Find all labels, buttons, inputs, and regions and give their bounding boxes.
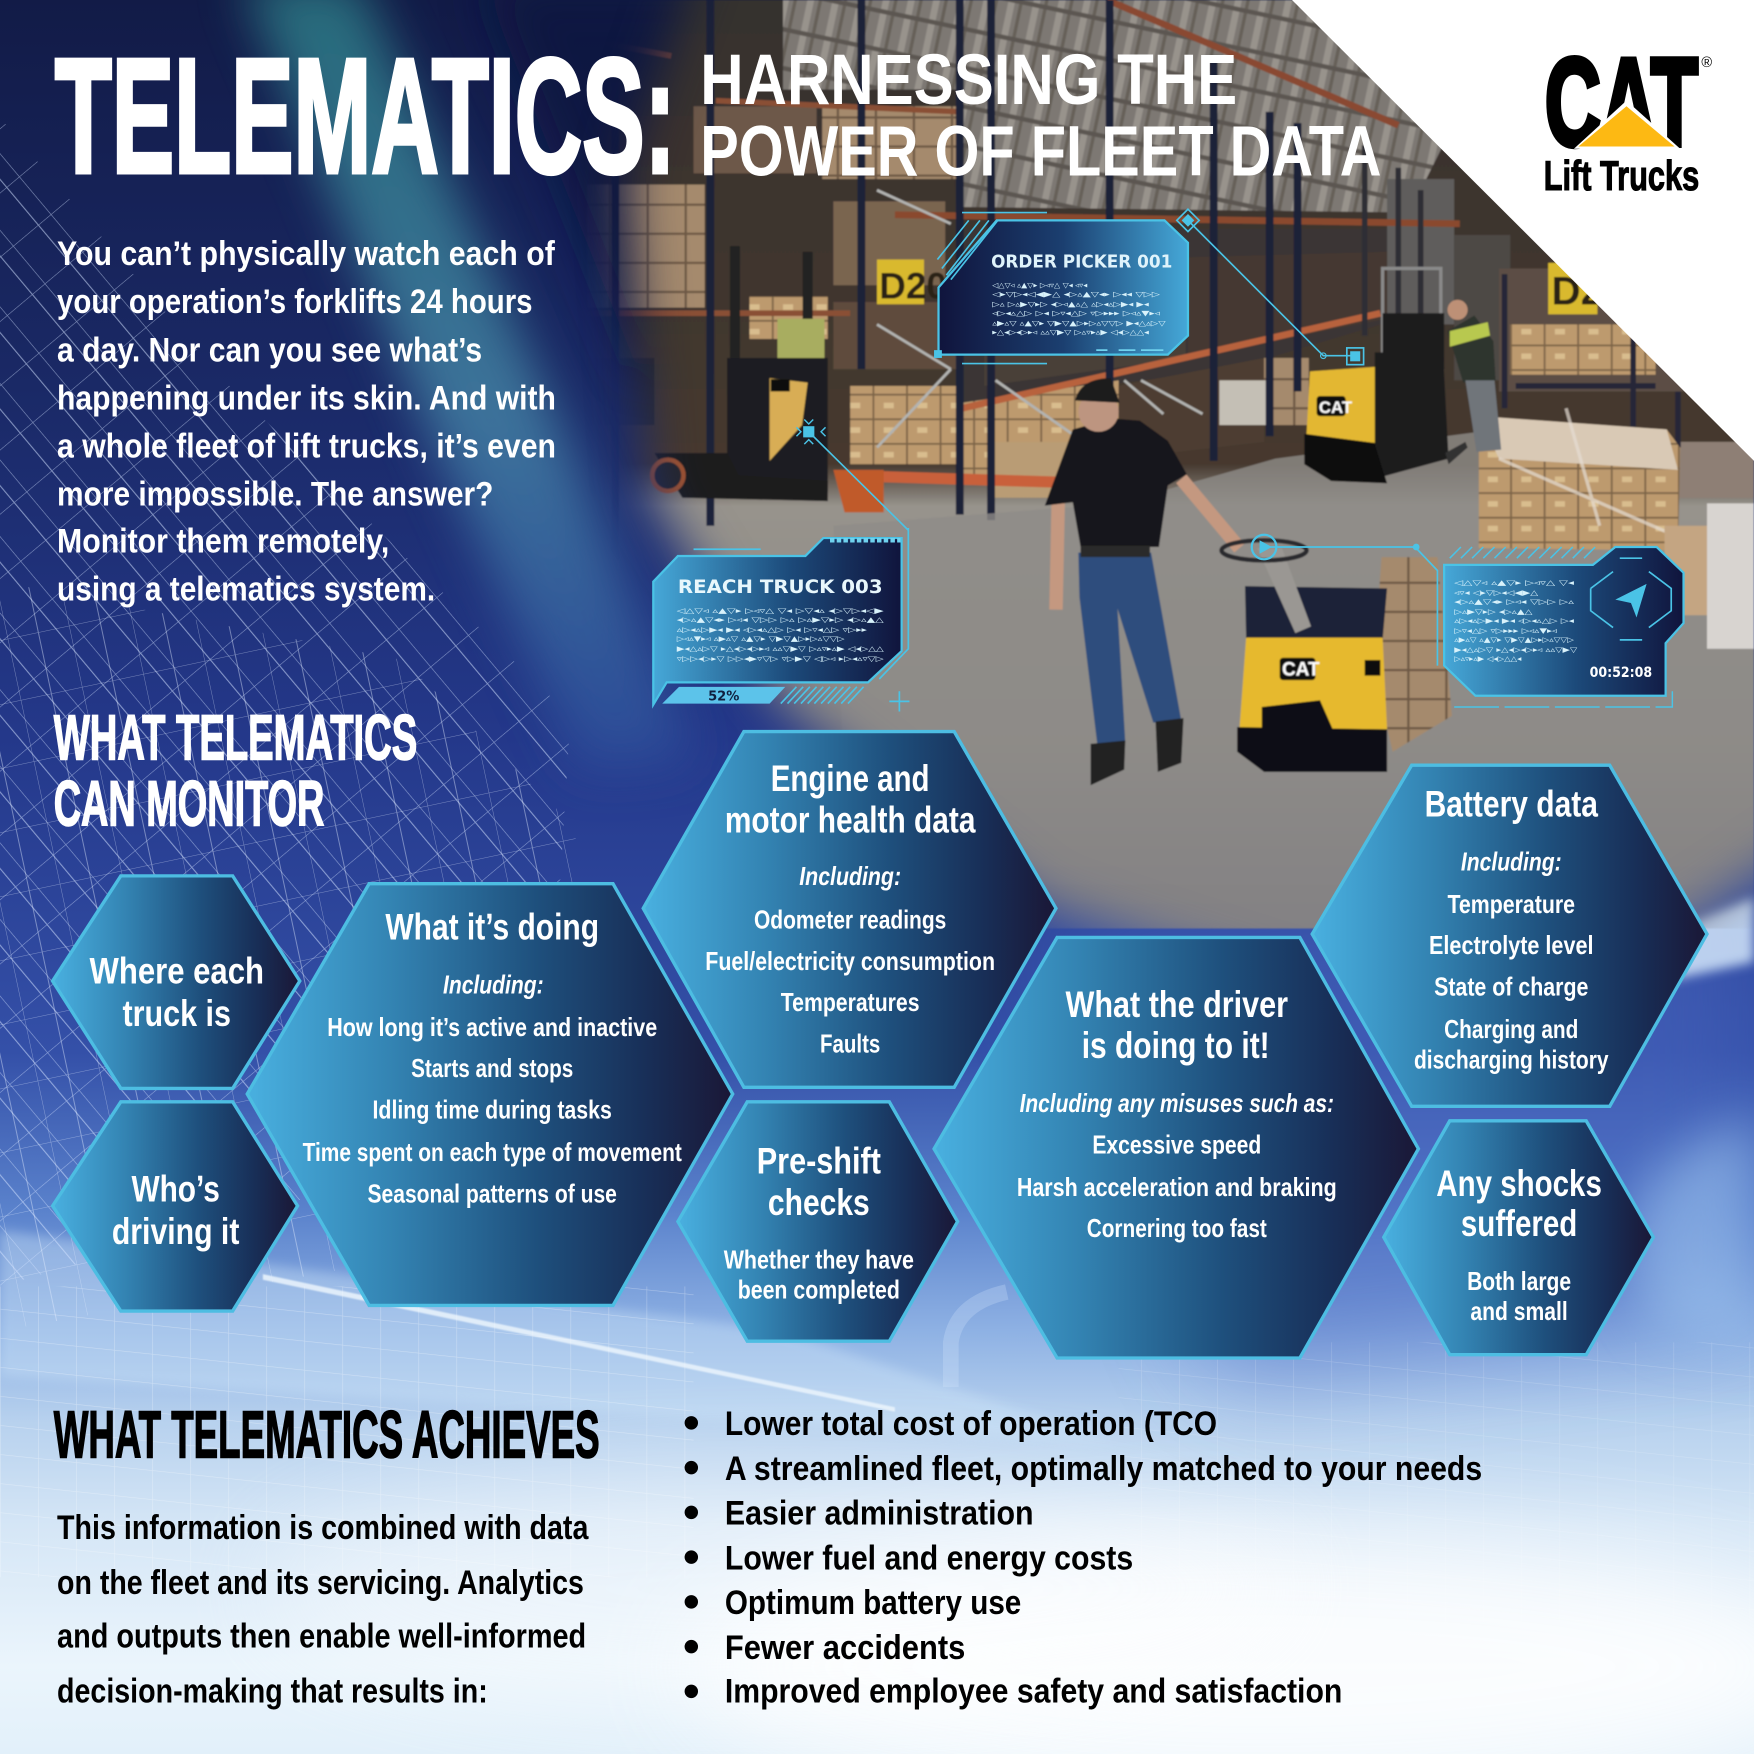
order picker truck xyxy=(1304,268,1501,483)
HUD: pallet truck timer panel: ▵▶▵▽ ▵▲▽▸ ▽▶▽▲▷▸▷▵▽▽▷ xyxy=(1454,635,1574,644)
sign: D20: D20 xyxy=(879,266,947,307)
HUD: order picker 001: ▷▵ ▷▵▶▽▸▷ ◂▷◃▲▵△ ▵▷◂▵▷▶◂ ▶◂ xyxy=(992,300,1149,309)
hexagon: pre-shift checks xyxy=(678,1102,958,1341)
rack contents: left stack xyxy=(587,0,962,464)
HUD: reach truck 003: ▵▷◂▵▷▶◂ ▶◂ ◃▷◂▵△▷ ▷◂ ▷▿◂△▷ ▿▷▸▸ xyxy=(677,625,867,634)
hexagon: what it's doing: Seasonal patterns of use xyxy=(367,1179,617,1209)
HUD: reach truck 003 xyxy=(653,528,909,711)
HUD: order picker 001: ▵▶▵▽ ▵▲▽▸ ▽▶▽▲▷▸▷▵▽▽▷ ▶◂△▵▷▽ xyxy=(992,319,1166,328)
hexagon: any shocks suffered: suffered xyxy=(1461,1203,1577,1244)
hexagon: engine and motor health data: Faults xyxy=(820,1029,880,1059)
bullet list of benefits: Lower fuel and energy costs xyxy=(725,1539,1133,1577)
intro paragraph: a whole fleet of lift trucks, it’s even xyxy=(57,428,556,466)
hexagon: battery data: Battery data xyxy=(1425,784,1598,825)
hexagon: what it's doing: How long it’s active and inactive xyxy=(327,1012,657,1042)
hexagon: engine and motor health data: motor health data xyxy=(725,799,976,840)
hexagon: what it's doing: Idling time during tasks xyxy=(373,1095,612,1125)
white corner triangle xyxy=(1292,0,1754,461)
hexagon: what it's doing xyxy=(247,884,733,1305)
hexagon: what the driver is doing to it xyxy=(934,937,1418,1358)
achievements paragraph xyxy=(57,1509,589,1711)
HUD: order picker 001: ORDER PICKER 001 xyxy=(991,252,1172,272)
HUD: reach truck 003: ◁△▽◃ ▵▲▽▸ ▷◃▿△ ▽◂ ▷▽◂▵ ◂▷▽▷◂◁▶ xyxy=(677,606,884,615)
hexagon: engine and motor health data: Odometer readings xyxy=(754,904,946,934)
HUD: order picker 001: ◃▷◂▵△▷ ▷◂ ▷▿◂△▷ ▿▷▸▸▸ ▷◃▵▼▸◃ xyxy=(992,308,1160,317)
hexagon: battery data: Including: xyxy=(1461,846,1562,876)
hexagon: any shocks suffered xyxy=(1384,1121,1653,1355)
HUD: pallet truck timer panel: ▷▵▿▸▵▶ ◁◂▷△△◂ xyxy=(1454,654,1522,663)
hexagon: pre-shift checks: checks xyxy=(768,1182,870,1223)
HUD: order picker 001: ◁▸▽▷◂◁◀▶△ ◂▷▵▲▽◂▸ ▷◂◂ ▽▷▷ xyxy=(992,289,1161,298)
hexagon: what the driver is doing to it: Cornering too fast xyxy=(1087,1213,1267,1243)
HUD: pallet truck timer panel: ▷▿◂△▷ ▿▷▸▸▸ ▷◃▵▼▸◃ xyxy=(1454,626,1558,635)
achievements paragraph: This information is combined with data xyxy=(57,1509,589,1547)
logo: CAT Lift Trucks: ® xyxy=(1701,55,1712,71)
heading: what telematics can monitor: WHAT TELEMATICS xyxy=(54,702,417,774)
HUD: pallet truck timer panel: ◂▷▵▲▽◂▸ ▷◃◂ ▽▷▷ ▷▵ xyxy=(1454,597,1574,606)
hexagon: pre-shift checks: Pre-shift xyxy=(757,1140,881,1181)
title: POWER OF FLEET DATA xyxy=(700,112,1381,192)
HUD: order picker 001: ▸△◂▷◂▷▸◃ ▵▵▽▶▽ ▷▵▿▸▵▶ ◁◂▷△△◂ xyxy=(992,327,1149,336)
rack uprights and beams xyxy=(608,0,1461,526)
HUD: pallet truck timer panel: ▷▵▶▽▸▷ ◂▷▵▲△ xyxy=(1454,607,1533,616)
hexagon: battery data: Electrolyte level xyxy=(1429,930,1593,960)
hexagon: what the driver is doing to it: What the driver xyxy=(1065,984,1288,1025)
rack contents: receding right xyxy=(962,0,1454,498)
hexagon: battery data: Temperature xyxy=(1447,889,1575,919)
intro paragraph: more impossible. The answer? xyxy=(57,476,493,514)
HUD: reach truck 003: ▷◃▵▼▸◃ ▵▶▵▽ ▵▲▽▸ ▽▶▽▲▷▸▷▵▽▽▷ xyxy=(677,634,845,643)
hexagon: who's driving it: driving it xyxy=(112,1211,239,1252)
HUD: order picker 001 xyxy=(934,213,1188,364)
pallet truck xyxy=(1222,540,1452,772)
right side rack: D2 xyxy=(1552,268,1603,313)
small truck logos: CAT xyxy=(1319,398,1353,417)
connector: reach truck target xyxy=(796,419,908,530)
reach truck xyxy=(652,246,884,512)
hexagon: what the driver is doing to it: Including any misuses such as: xyxy=(1020,1088,1334,1118)
bullet list of benefits: Improved employee safety and satisfaction xyxy=(725,1673,1342,1711)
hexagon: any shocks suffered: Any shocks xyxy=(1436,1163,1602,1204)
title: TELEMATICS: xyxy=(55,24,676,207)
pallet truck: CAT xyxy=(1282,660,1320,681)
HUD: reach truck 003: ◂▷▵▲▽◂▸ ▷◃◂ ▽▷▷ ▷▵ ▷▵▶▽▸▷ ◂▷▵▲△ xyxy=(677,615,884,624)
title: HARNESSING THE xyxy=(700,40,1237,120)
hexagon: any shocks suffered: and small xyxy=(1470,1296,1568,1326)
bullet list of benefits: Optimum battery use xyxy=(725,1584,1021,1622)
hexagon: where each truck is xyxy=(53,876,300,1088)
hexagon: battery data: discharging history xyxy=(1414,1044,1609,1074)
bullet list of benefits xyxy=(685,1405,1482,1711)
hexagon: where each truck is: truck is xyxy=(122,993,231,1034)
bullet list of benefits: A streamlined fleet, optimally matched to your needs xyxy=(725,1450,1482,1488)
hexagon: what it's doing: Including: xyxy=(443,969,544,999)
bullet list of benefits: Easier administration xyxy=(725,1495,1034,1533)
HUD: order picker 001: ◁△▽◃ ▵▲▽▸ ▷◃▿△ ▽◂ ◃▿◂ xyxy=(992,280,1088,289)
hexagon: where each truck is: Where each xyxy=(89,950,264,991)
achievements paragraph: on the fleet and its servicing. Analytics xyxy=(57,1564,584,1602)
warehouse photograph xyxy=(526,0,1754,928)
hexagon: what it's doing: What it’s doing xyxy=(385,907,599,948)
achievements paragraph: decision-making that results in: xyxy=(57,1673,488,1711)
hexagon: what the driver is doing to it: Harsh acceleration and braking xyxy=(1017,1172,1337,1202)
HUD: pallet truck timer panel: ▶◂△▵▷▽ ▸△◂▷◂▷▸◃ ▵▵▽▶▽ xyxy=(1454,645,1578,654)
hexagon: engine and motor health data: Fuel/electricity consumption xyxy=(705,946,995,976)
hexagon: what it's doing: Starts and stops xyxy=(411,1053,573,1083)
hexagon: what the driver is doing to it: is doing to it! xyxy=(1082,1025,1270,1066)
intro paragraph xyxy=(57,235,556,609)
logo: CAT Lift Trucks: Lift Trucks xyxy=(1544,153,1699,199)
HUD: reach truck 003: REACH TRUCK 003 xyxy=(678,577,883,598)
right side rack xyxy=(1454,235,1754,498)
hexagon: engine and motor health data: Engine and xyxy=(771,758,930,799)
hexagon: battery data: Charging and xyxy=(1444,1014,1578,1044)
heading: what telematics can monitor xyxy=(54,702,417,840)
hexagon: who's driving it xyxy=(53,1102,298,1311)
hexagon: battery data xyxy=(1312,765,1707,1106)
HUD: reach truck 003: 52% xyxy=(708,689,739,704)
HUD: pallet truck timer panel: ◃▿◂ ◁▸▽▷◂◁◀▶△ xyxy=(1454,588,1539,597)
intro paragraph: using a telematics system. xyxy=(57,571,435,609)
big wrapped pallet xyxy=(1479,408,1754,649)
bullet list of benefits: Fewer accidents xyxy=(725,1629,965,1667)
hexagon: engine and motor health data: Temperatures xyxy=(781,987,920,1017)
man xyxy=(1045,378,1239,785)
HUD: reach truck 003: ▶◂△▵▷▽ ▸△◂▷◂▷▸◃ ▵▵▽▶▽ ▷▵▿▸▵▶ ◁◂▷△△ xyxy=(677,644,884,653)
HUD: reach truck 003: ▿▷▷◂▷▸▽ ▷▷◂▶▿▽▷ ▿▷▶▽ ◁▷◃ ▸▷◂▵▿▽▷ xyxy=(677,654,884,663)
intro paragraph: happening under its skin. And with xyxy=(57,379,556,417)
hexagon: any shocks suffered: Both large xyxy=(1467,1266,1571,1296)
bullet list of benefits: Lower total cost of operation (TCO xyxy=(725,1405,1217,1443)
floor xyxy=(976,432,1754,930)
intro paragraph: your operation’s forklifts 24 hours xyxy=(57,283,532,321)
HUD: pallet truck timer panel: ▵▷◂▵▷▶◂ ▶◂ ◃▷◂▵△▷ ▷◂ xyxy=(1454,616,1574,625)
hexagon: what it's doing: Time spent on each type of movement xyxy=(303,1137,682,1167)
intro paragraph: Monitor them remotely, xyxy=(57,523,389,561)
hexagon: what the driver is doing to it: Excessive speed xyxy=(1092,1129,1261,1159)
intro paragraph: You can’t physically watch each of xyxy=(57,235,555,273)
hexagon: pre-shift checks: Whether they have xyxy=(724,1245,914,1275)
achievements paragraph: and outputs then enable well-informed xyxy=(57,1618,586,1656)
hexagon: battery data: State of charge xyxy=(1434,972,1588,1002)
hexagon: engine and motor health data xyxy=(643,732,1056,1087)
HUD: pallet truck timer panel: 00:52:08 xyxy=(1590,665,1652,681)
HUD: pallet truck timer panel: ◁△▽◃ ▵▲▽▸ ▷◃▿△ ▽◂ xyxy=(1454,578,1574,587)
heading: what telematics can monitor: CAN MONITOR xyxy=(54,768,324,840)
heading: what telematics achieves: WHAT TELEMATICS ACHIEVES xyxy=(54,1398,600,1473)
HUD: pallet truck timer panel xyxy=(1252,535,1684,707)
intro paragraph: a day. Nor can you see what’s xyxy=(57,331,482,369)
connector: order picker to truck xyxy=(1177,209,1364,365)
hexagon: pre-shift checks: been completed xyxy=(738,1275,900,1305)
logo: CAT Lift Trucks xyxy=(1544,32,1712,199)
small truck logos xyxy=(771,379,1380,676)
hexagon: who's driving it: Who’s xyxy=(131,1168,220,1209)
hexagon: engine and motor health data: Including: xyxy=(799,861,901,891)
